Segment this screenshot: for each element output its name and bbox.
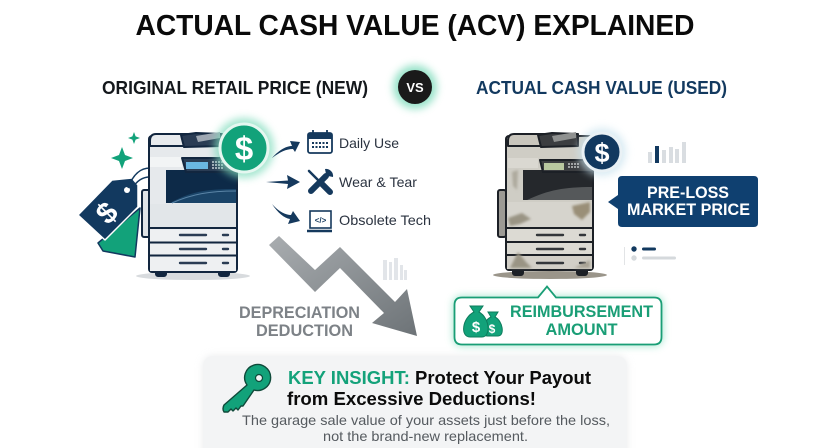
icon: faint bar chart	[383, 258, 407, 280]
heading: actual cash value: ACTUAL CASH VALUE (USED)	[476, 78, 727, 98]
arrow: to obsolete tech	[272, 204, 300, 224]
callout: reimbursement amount: AMOUNT	[546, 321, 618, 339]
icon: used value dollar badge: $	[594, 138, 610, 168]
icon: laptop code	[307, 211, 332, 231]
icon: key	[223, 365, 271, 412]
panel: key insight: from Excessive Deductions!	[287, 389, 536, 409]
arrow: to daily use	[272, 141, 300, 158]
text: explanation	[242, 412, 610, 444]
icon: new price dollar badge: $	[235, 130, 253, 167]
text: explanation: The garage sale value of your assets just before the loss,	[242, 412, 610, 428]
label: depreciation deduction	[239, 303, 360, 340]
arrow: depreciation	[269, 236, 417, 336]
icon: wrench and screwdriver	[309, 169, 333, 192]
panel: key insight	[203, 356, 627, 448]
label: depreciation deduction: DEDUCTION	[256, 321, 353, 340]
title: ACTUAL CASH VALUE (ACV) EXPLAINED	[136, 10, 694, 42]
vs badge: VS	[406, 80, 424, 95]
label: obsolete tech: Obsolete Tech	[339, 212, 431, 228]
icon: new price dollar badge	[214, 118, 274, 178]
label: daily use: Daily Use	[339, 135, 399, 151]
icon: used value dollar badge	[578, 128, 626, 176]
arrow: to wear and tear	[266, 175, 300, 189]
label: wear and tear: Wear & Tear	[339, 174, 417, 190]
callout: pre-loss market price: PRE-LOSS	[647, 184, 729, 202]
heading: original retail price: ORIGINAL RETAIL PRICE (NEW)	[102, 78, 368, 98]
callout: reimbursement amount: REIMBURSEMENT	[510, 303, 653, 321]
icon: small bar chart	[648, 142, 686, 163]
icon: money bags	[464, 306, 502, 337]
icon: sparkles	[111, 132, 140, 169]
callout: pre-loss market price	[608, 176, 758, 227]
callout: pre-loss market price: MARKET PRICE	[627, 201, 750, 219]
icon: price tags: $	[90, 196, 125, 231]
heading: key insight: KEY INSIGHT: Protect Your Payout	[288, 368, 591, 388]
illustration: used copier	[493, 132, 607, 279]
vs badge	[393, 65, 437, 109]
text: explanation: not the brand-new replacement.	[323, 428, 528, 444]
icon: calendar	[308, 130, 332, 153]
icon: small legend	[624, 246, 676, 265]
illustration: new copier	[136, 132, 250, 280]
icon: laptop code: </>	[315, 216, 327, 225]
icon: price tags	[78, 168, 150, 257]
callout: reimbursement amount	[453, 286, 663, 346]
label: depreciation deduction: DEPRECIATION	[239, 303, 360, 322]
icon: money bags: $	[472, 319, 481, 336]
icon: money bags: $	[489, 322, 496, 336]
